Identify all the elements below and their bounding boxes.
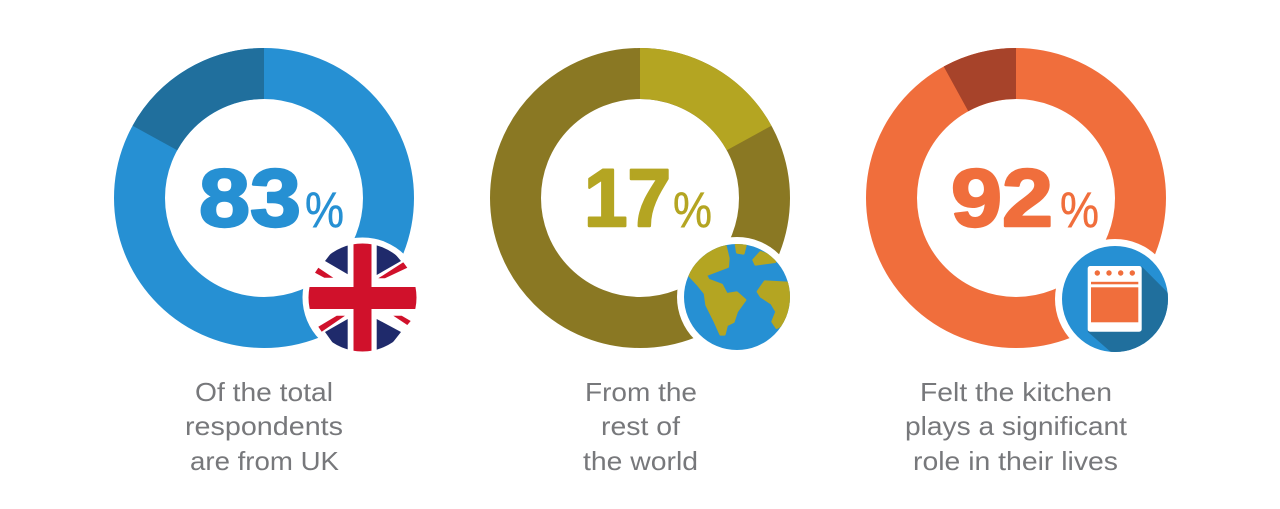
panel: kitchen significance [892,73,1190,476]
icon: UK flag [302,238,422,358]
caption: rest of the world: From the [585,377,697,407]
caption: kitchen significance: Felt the kitchen [920,377,1112,407]
caption: UK respondents: are from UK [190,446,340,476]
caption: rest of the world: rest of [601,411,681,441]
icon: oven [1055,239,1168,352]
donut chart: 92% [892,73,1140,322]
value: 83% [199,153,344,244]
caption: UK respondents: Of the total [195,377,333,407]
caption: kitchen significance [905,377,1128,476]
panel: UK respondents [140,74,422,476]
caption: rest of the world [583,377,698,476]
caption: UK respondents [185,377,343,476]
caption: kitchen significance: plays a significant [905,411,1128,441]
value: 83%: 83 [199,153,301,244]
value: 92%: 92 [951,153,1053,244]
value: 92%: % [1060,182,1099,238]
value: 92% [951,153,1099,244]
value: 17%: % [673,182,712,238]
value: 83%: % [305,182,344,238]
value: 17%: 17 [584,153,671,244]
donut chart: 17% [516,74,764,322]
donut chart: 83% [140,74,388,322]
panel: rest of the world [516,74,797,476]
caption: UK respondents: respondents [185,411,343,441]
caption: rest of the world: the world [583,446,698,476]
caption: kitchen significance: role in their lives [913,446,1118,476]
icon: globe [677,237,790,350]
